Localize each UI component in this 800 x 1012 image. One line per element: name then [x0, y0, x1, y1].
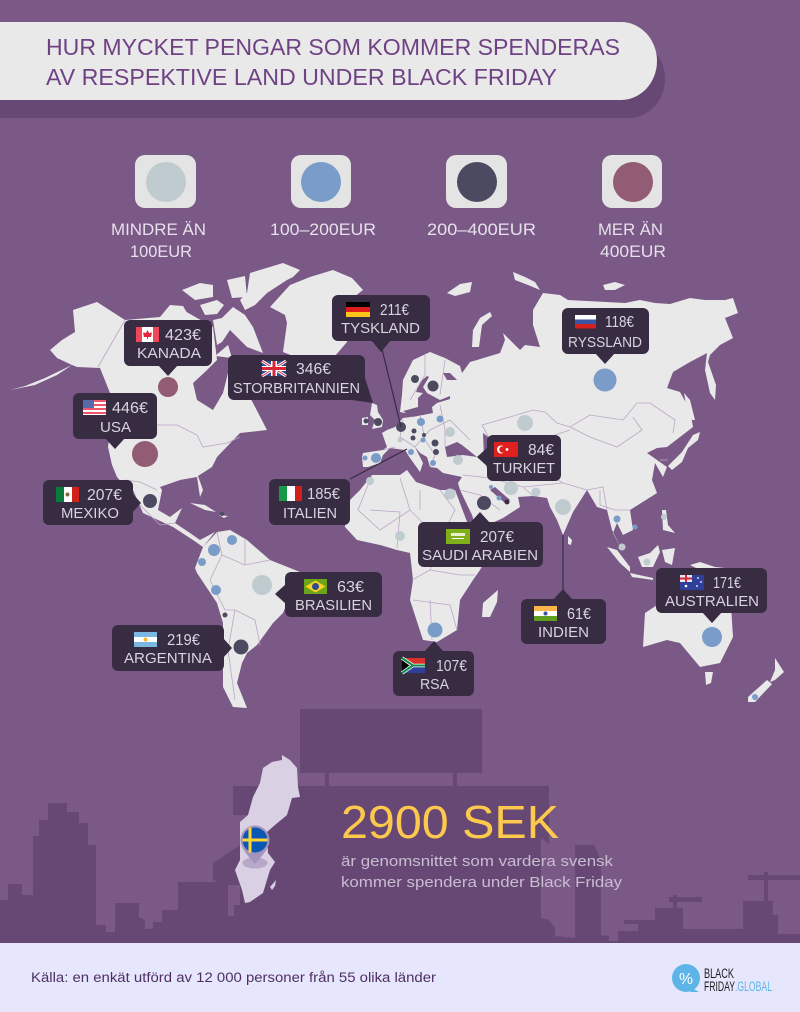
callout: RSA: [393, 641, 474, 696]
country borders: [98, 320, 675, 700]
callout: Tyskland: TYSKLAND: [341, 320, 420, 337]
callout: Turkiet: TURKIET: [493, 460, 555, 477]
callout: RSA: RSA: [420, 676, 449, 693]
Sweden map with pin: [235, 755, 300, 903]
legend: [111, 155, 666, 261]
callout: Ryssland: RYSSLAND: [568, 334, 642, 351]
legend: 400EUR: [600, 243, 666, 261]
callout: Ryssland: 118€: [605, 314, 634, 331]
callout: Australien: AUSTRALIEN: [665, 593, 759, 610]
seas cut into land: [403, 373, 510, 503]
callout: Indien: [521, 589, 606, 644]
callout: Storbritannien: 346€: [296, 361, 331, 378]
callout: Saudi Arabien: 207€: [480, 529, 514, 546]
callout: Italien: [269, 479, 350, 525]
callout: Kanada: KANADA: [137, 345, 201, 362]
callout: Brasilien: 63€: [337, 579, 364, 596]
callout: Italien: ITALIEN: [283, 505, 337, 522]
title banner: AV RESPEKTIVE LAND UNDER BLACK FRIDAY: [46, 64, 557, 90]
world map: [10, 263, 784, 708]
Sri Lanka: [568, 536, 572, 545]
callout: Mexiko: 207€: [87, 487, 122, 504]
callout: RSA: 107€: [436, 658, 467, 675]
logo: %: [679, 971, 693, 988]
headline stat: [341, 796, 623, 891]
logo: [672, 964, 772, 994]
skyline background: [0, 709, 800, 945]
callout: Kanada: 423€: [165, 327, 201, 344]
logo: BLACK: [704, 966, 734, 981]
callout: Italien: 185€: [307, 486, 340, 503]
legend: 200–400EUR: [427, 221, 536, 239]
callout: USA: [73, 393, 157, 449]
title banner: HUR MYCKET PENGAR SOM KOMMER SPENDERAS: [46, 34, 620, 60]
callout: Indien: INDIEN: [538, 624, 589, 641]
icon: location pin with Swedish flag: [240, 826, 270, 864]
callout: Turkiet: [477, 435, 561, 481]
North America: [10, 302, 267, 547]
callout: Brasilien: BRASILIEN: [295, 597, 372, 614]
callout: Indien: 61€: [567, 606, 591, 623]
legend: 100–200EUR: [270, 221, 376, 239]
callout: Argentina: 219€: [167, 632, 200, 649]
Africa: [345, 470, 497, 642]
Novaya Zemlya, Arctic islands: [472, 312, 492, 347]
callout: Mexiko: [43, 480, 141, 525]
data circles: [132, 368, 758, 700]
callout: Argentina: [112, 625, 232, 671]
callout: Saudi Arabien: SAUDI ARABIEN: [422, 547, 538, 564]
title banner: [0, 22, 665, 118]
callout: Argentina: ARGENTINA: [124, 650, 212, 667]
headline stat: 2900 SEK: [341, 796, 559, 848]
callout: Saudi Arabien: [418, 512, 543, 567]
leader lines: [350, 345, 563, 592]
footer: [0, 943, 800, 1012]
Madagascar: [482, 590, 498, 617]
South America: [195, 530, 300, 708]
callout: USA: 446€: [112, 400, 148, 417]
headline stat: är genomsnittet som vardera svensk: [341, 853, 614, 870]
headline stat: kommer spendera under Black Friday: [341, 874, 623, 891]
Australia, Tasmania, New Zealand: [643, 590, 733, 667]
Arctic Canada islands: [213, 307, 263, 353]
callout: Mexiko: MEXIKO: [61, 505, 119, 522]
footer: Källa: en enkät utförd av 12 000 personer från 55 olika länder: [31, 970, 437, 985]
callout: Storbritannien: [228, 355, 373, 403]
callout: Ryssland: [562, 308, 649, 364]
callout: Brasilien: [275, 572, 382, 617]
Southeast Asia islands: [607, 547, 630, 572]
logo: .GLOBAL: [735, 979, 772, 994]
callout: Storbritannien: STORBRITANNIEN: [233, 380, 360, 397]
callout: Australien: 171€: [713, 575, 741, 592]
callout: Tyskland: [332, 295, 430, 352]
callout: Australien: [656, 568, 767, 623]
callout: Turkiet: 84€: [528, 442, 554, 459]
legend: MER ÄN: [598, 221, 663, 239]
Eurasia: [362, 293, 738, 550]
callout: USA: USA: [100, 419, 131, 436]
shadow under pin: [242, 858, 268, 868]
Japan, Sakhalin: [668, 432, 700, 470]
logo: FRIDAY: [704, 979, 735, 994]
legend: MINDRE ÄN: [111, 221, 206, 239]
callout: Tyskland: 211€: [380, 302, 409, 319]
legend: 100EUR: [130, 243, 192, 261]
Caribbean: [190, 503, 216, 512]
Greenland: [270, 270, 363, 356]
callout: Kanada: [124, 320, 212, 376]
UK and Ireland: [370, 403, 383, 429]
